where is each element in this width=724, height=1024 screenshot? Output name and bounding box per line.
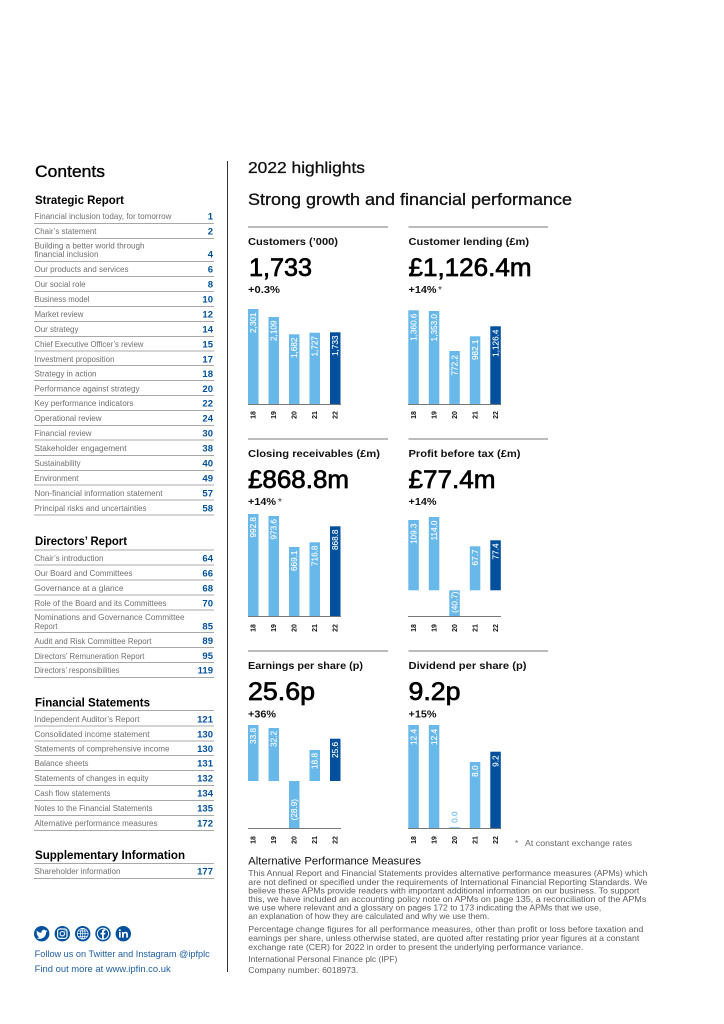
bar chart: customer lending: 21 <box>472 411 479 419</box>
section: Directors' Report <box>34 534 214 678</box>
heading: Contents: Contents <box>35 162 105 181</box>
section: Directors' Report: Our Board and Committees <box>34 569 132 578</box>
heading: 2022 highlights: 2022 highlights <box>248 160 365 177</box>
vertical divider <box>226 161 228 972</box>
panel: profit before tax: +14% <box>408 497 437 508</box>
panel: closing receivables: * <box>278 497 282 508</box>
bar chart: customers: 1,727 <box>311 336 320 356</box>
section: Strategic Report: Principal risks and uncertainties <box>34 504 146 513</box>
text block: alternative performance measures: Percentage change figures for all performance measures, other than profit or loss before taxation and <box>248 924 644 934</box>
section: Strategic Report: Financial inclusion today, for tomorrow <box>34 212 172 221</box>
bar chart: profit before tax: 77.4 <box>492 543 500 559</box>
bar chart: closing receivables: 21 <box>312 624 319 632</box>
section: Directors' Report: 70 <box>202 598 213 610</box>
section: Strategic Report: 17 <box>202 354 213 366</box>
bar chart: closing receivables: 973.6 <box>270 519 279 540</box>
section: Strategic Report: Performance against strategy <box>34 384 140 394</box>
section: Strategic Report: Operational review <box>34 414 102 423</box>
text block: alternative performance measures: believe these APMs provide readers with important additional information on our business. To support <box>248 886 640 896</box>
footnote: constant exchange rates: At constant exchange rates <box>525 839 632 848</box>
section: Strategic Report: Stakeholder engagement <box>34 444 127 453</box>
bar chart: profit before tax: 20 <box>452 624 459 632</box>
section: Strategic Report: Our strategy <box>34 325 78 334</box>
bar chart: dividend per share: 18 <box>411 836 418 844</box>
bar chart: earnings per share: 19 <box>271 836 278 844</box>
bar chart: customer lending: 19 <box>431 411 438 419</box>
panel: profit before tax <box>408 439 548 632</box>
bar chart: dividend per share: 9.2 <box>492 755 500 767</box>
section: Strategic Report: Chief Executive Officer’s review <box>34 340 144 349</box>
panel: profit before tax: £77.4m <box>408 466 496 494</box>
panel: customer lending: +14% <box>408 285 437 296</box>
bar chart: customers: 19 <box>271 411 278 419</box>
panel: profit before tax: Profit before tax (£m) <box>408 448 520 460</box>
icon: facebook <box>95 926 111 941</box>
section: Strategic Report: Our social role <box>34 280 86 289</box>
bar chart: dividend per share: 12.4 <box>410 729 418 745</box>
icon: instagram <box>55 926 70 941</box>
section: Strategic Report: Building a better world through <box>34 242 144 250</box>
section: Directors' Report: Audit and Risk Committee Report <box>34 637 152 646</box>
section: Financial Statements: 131 <box>197 758 214 770</box>
section: Directors' Report: 85 <box>202 622 214 632</box>
section: Financial Statements: Independent Auditor’s Report <box>34 715 140 724</box>
section: Strategic Report: 15 <box>202 340 214 350</box>
section: Financial Statements: Alternative performance measures <box>34 819 158 828</box>
bar chart: earnings per share: 32.2 <box>270 731 279 747</box>
section: Financial Statements: 132 <box>197 774 213 784</box>
social icons <box>34 926 131 941</box>
panel: earnings per share: Earnings per share (p) <box>248 660 363 672</box>
bar chart: customer lending: 772.2 <box>450 355 460 376</box>
panel: dividend per share: Dividend per share (p) <box>408 660 526 672</box>
follow us links: Find out more at www.ipfin.co.uk <box>35 964 171 974</box>
text block: alternative performance measures: this, we have included an accounting policy note on APMs on page 135, a reconciliation of the APMs <box>248 894 646 904</box>
text block: alternative performance measures: are not defined or specified under the requirements of International Financial Reporting Standards. We <box>248 877 648 887</box>
section: Financial Statements: Notes to the Financial Statements <box>34 804 152 813</box>
section: Strategic Report: financial inclusion <box>34 250 98 259</box>
section: Financial Statements <box>34 696 214 830</box>
bar chart: customer lending <box>408 310 501 419</box>
bar chart: closing receivables: 20 <box>292 624 298 632</box>
icon: linkedin <box>116 926 131 941</box>
bar chart: customers <box>248 309 341 419</box>
bar chart: profit before tax: 114.0 <box>430 520 439 540</box>
text block: alternative performance measures: exchange rate (CER) for 2022 in order to present the underlying performance variance. <box>248 942 583 952</box>
bar chart: customers: 2,109 <box>270 320 279 341</box>
bar chart: closing receivables: 19 <box>271 624 278 632</box>
section: Financial Statements: 134 <box>197 788 214 800</box>
section: Directors' Report: Chair’s introduction <box>34 554 104 563</box>
bar chart: dividend per share: 21 <box>472 836 479 844</box>
section: Directors' Report: Directors’ Remuneration Report <box>34 652 145 661</box>
bar chart: customer lending: 1,360.6 <box>410 313 418 341</box>
bar chart: dividend per share: 22 <box>493 836 500 844</box>
bar chart: closing receivables: 992.8 <box>249 517 258 538</box>
bar chart: profit before tax: 19 <box>431 624 438 632</box>
section: Strategic Report: Non-financial information statement <box>34 489 163 498</box>
section: Strategic Report <box>34 193 214 515</box>
section: Strategic Report: 18 <box>202 369 213 380</box>
panel: earnings per share <box>248 651 388 844</box>
panel: closing receivables: £868.8m <box>248 466 349 494</box>
bar chart: dividend per share: 20 <box>452 836 459 844</box>
bar chart: customers: 21 <box>312 411 319 419</box>
section: Directors' Report: Directors’ responsibilities <box>34 666 120 675</box>
panel: contents sidebar <box>34 162 214 974</box>
section: Strategic Report: Financial review <box>34 429 92 438</box>
section: Directors' Report: Governance at a glance <box>34 584 124 593</box>
text block: alternative performance measures: earnings per share, unless otherwise stated, are quoted after restating prior year figures at a constant <box>248 933 640 943</box>
section: Strategic Report: 40 <box>202 458 213 470</box>
bar chart: customer lending: 982.1 <box>471 339 480 360</box>
bar chart: dividend per share: 12.4 <box>430 729 439 745</box>
bar chart: profit before tax: (40.7) <box>450 591 460 613</box>
panel: dividend per share: 9.2p <box>408 678 460 706</box>
section: Strategic Report: Key performance indicators <box>34 399 134 408</box>
bar chart: profit before tax: 22 <box>493 624 500 632</box>
section: Directors' Report: 64 <box>202 554 214 564</box>
bar chart: closing receivables: 669.1 <box>290 550 299 571</box>
bar chart: earnings per share: 18 <box>250 836 258 844</box>
bar chart: closing receivables <box>248 514 341 632</box>
section: Strategic Report: Market review <box>34 310 84 319</box>
bar chart: profit before tax: 109.3 <box>410 523 418 544</box>
section: Strategic Report: Chair’s statement <box>34 227 97 236</box>
bar chart: closing receivables: 18 <box>250 624 258 632</box>
bar chart: customers: 22 <box>332 411 340 419</box>
text block: alternative performance measures: This Annual Report and Financial Statements provides alternative performance measures (APMs) which <box>248 868 648 878</box>
panel: customer lending <box>408 227 548 419</box>
section: Directors' Report: Directors’ Report <box>35 534 127 548</box>
section: Strategic Report: 8 <box>208 280 213 290</box>
section: Strategic Report: Business model <box>34 295 90 304</box>
bar chart: profit before tax: 21 <box>472 624 479 632</box>
section: Supplementary Information: Supplementary Information <box>35 848 185 862</box>
section: Directors' Report: 95 <box>202 651 214 662</box>
bar chart: customers: 2,301 <box>249 312 258 333</box>
bar chart: dividend per share: 0.0 <box>450 811 460 823</box>
text block: alternative performance measures: an explanation of how they are calculated and why we use them. <box>248 911 489 921</box>
icon: twitter <box>34 926 49 941</box>
panel: dividend per share: +15% <box>408 710 437 720</box>
bar chart: customer lending: 1,353.0 <box>430 314 439 341</box>
section: Strategic Report: Our products and services <box>34 265 128 274</box>
footnote: constant exchange rates: * <box>515 839 518 848</box>
bar chart: earnings per share: 18.8 <box>311 753 320 769</box>
section: Strategic Report: 2 <box>208 226 213 238</box>
panel: dividend per share <box>408 651 548 844</box>
text block: alternative performance measures: International Personal Finance plc (IPF) <box>248 954 397 964</box>
section: Strategic Report: Investment proposition <box>34 355 114 364</box>
bar chart: earnings per share <box>248 725 341 844</box>
section: Supplementary Information: 177 <box>197 866 213 878</box>
bar chart: dividend per share: 8.0 <box>471 765 480 777</box>
bar chart: customer lending: 18 <box>411 411 418 419</box>
section: Directors' Report: 66 <box>202 568 213 580</box>
section: Financial Statements: Consolidated income statement <box>34 730 150 739</box>
panel: customer lending: Customer lending (£m) <box>408 236 529 248</box>
bar chart: closing receivables: 868.8 <box>331 529 340 550</box>
section: Supplementary Information: Shareholder information <box>34 867 120 876</box>
section: Supplementary Information <box>34 848 214 878</box>
text block: alternative performance measures <box>247 856 648 975</box>
section: Strategic Report: 14 <box>202 324 214 336</box>
section: Strategic Report: 4 <box>208 250 214 260</box>
panel: earnings per share: +36% <box>248 710 276 720</box>
bar chart: earnings per share: 25.6 <box>331 742 340 758</box>
section: Financial Statements: Financial Statements <box>35 696 150 710</box>
section: Financial Statements: 121 <box>197 714 214 726</box>
follow us links: Follow us on Twitter and Instagram @ipfplc <box>35 949 210 959</box>
section: Financial Statements: Statements of changes in equity <box>34 774 148 783</box>
section: Strategic Report: 38 <box>202 444 213 454</box>
heading: Strong growth and financial performance: Strong growth and financial performance <box>248 191 572 209</box>
section: Strategic Report: Strategy in action <box>34 370 96 378</box>
section: Strategic Report: 30 <box>202 428 213 440</box>
bar chart: customers: 1,682 <box>290 337 299 358</box>
section: Directors' Report: 119 <box>198 666 213 676</box>
bar chart: earnings per share: 22 <box>332 836 340 844</box>
follow us links <box>35 949 210 974</box>
panel: earnings per share: 25.6p <box>248 678 315 706</box>
bar chart: customer lending: 1,126.4 <box>492 329 500 357</box>
section: Strategic Report: 58 <box>202 504 213 514</box>
bar chart: profit before tax: 18 <box>411 624 418 632</box>
section: Directors' Report: 89 <box>202 636 213 647</box>
bar chart: earnings per share: 20 <box>292 836 298 844</box>
section: Strategic Report: Strategic Report <box>35 193 124 207</box>
section: Strategic Report: 20 <box>202 384 213 395</box>
panel: customers: 1,733 <box>249 254 312 282</box>
panel: customer lending: * <box>438 285 442 296</box>
section: Strategic Report: 6 <box>208 264 213 276</box>
section: Financial Statements: 172 <box>197 818 213 830</box>
section: Strategic Report: 57 <box>202 488 213 500</box>
panel: customer lending: £1,126.4m <box>408 254 532 282</box>
bar chart: earnings per share: (28.9) <box>290 799 299 820</box>
section: Strategic Report: 22 <box>202 398 213 410</box>
text block: alternative performance measures: Company number: 6018973. <box>248 965 358 975</box>
section: Strategic Report: Sustainability <box>34 459 80 468</box>
section: Financial Statements: 130 <box>197 730 213 740</box>
bar chart: dividend per share <box>408 725 501 844</box>
section: Directors' Report: Role of the Board and its Committees <box>34 599 166 608</box>
panel: customers: Customers (’000) <box>248 236 338 248</box>
section: Financial Statements: Balance sheets <box>34 759 88 768</box>
section: Financial Statements: 135 <box>197 804 214 814</box>
section: Strategic Report: 24 <box>202 414 214 424</box>
bar chart: closing receivables: 716.8 <box>311 545 320 566</box>
text block: alternative performance measures: we use where relevant and a glossary on pages 172 to 173 indicating the APMs that we use, <box>247 902 601 912</box>
section: Strategic Report: Environment <box>34 474 79 483</box>
section: Financial Statements: Cash flow statements <box>34 789 110 798</box>
panel: customers: +0.3% <box>248 285 280 296</box>
section: Financial Statements: Statements of comprehensive income <box>34 744 170 754</box>
bar chart: profit before tax <box>408 517 501 632</box>
panel: customers <box>248 227 388 419</box>
section: Financial Statements: 130 <box>197 744 213 755</box>
text block: alternative performance measures: Alternative Performance Measures <box>248 856 422 868</box>
bar chart: customer lending: 20 <box>452 411 459 419</box>
section: Directors' Report: Report <box>34 622 58 631</box>
panel: closing receivables: Closing receivables (£m) <box>248 448 380 460</box>
panel: closing receivables <box>248 439 388 632</box>
bar chart: closing receivables: 22 <box>332 624 340 632</box>
bar chart: profit before tax: 67.7 <box>471 549 480 565</box>
section: Strategic Report: 12 <box>202 310 213 320</box>
section: Strategic Report: 10 <box>202 294 213 306</box>
bar chart: dividend per share: 19 <box>431 836 438 844</box>
section: Strategic Report: 49 <box>202 474 213 484</box>
bar chart: customer lending: 22 <box>493 411 500 419</box>
bar chart: customers: 1,733 <box>331 335 340 356</box>
section: Directors' Report: Nominations and Governance Committee <box>34 613 185 622</box>
bar chart: customers: 18 <box>250 411 258 419</box>
bar chart: customers: 20 <box>292 411 298 419</box>
section: Strategic Report: 1 <box>208 212 214 222</box>
bar chart: earnings per share: 33.8 <box>249 728 258 744</box>
bar chart: earnings per share: 21 <box>312 836 319 844</box>
panel: closing receivables: +14% <box>248 497 276 508</box>
section: Directors' Report: 68 <box>202 584 213 594</box>
icon: globe <box>75 926 90 941</box>
